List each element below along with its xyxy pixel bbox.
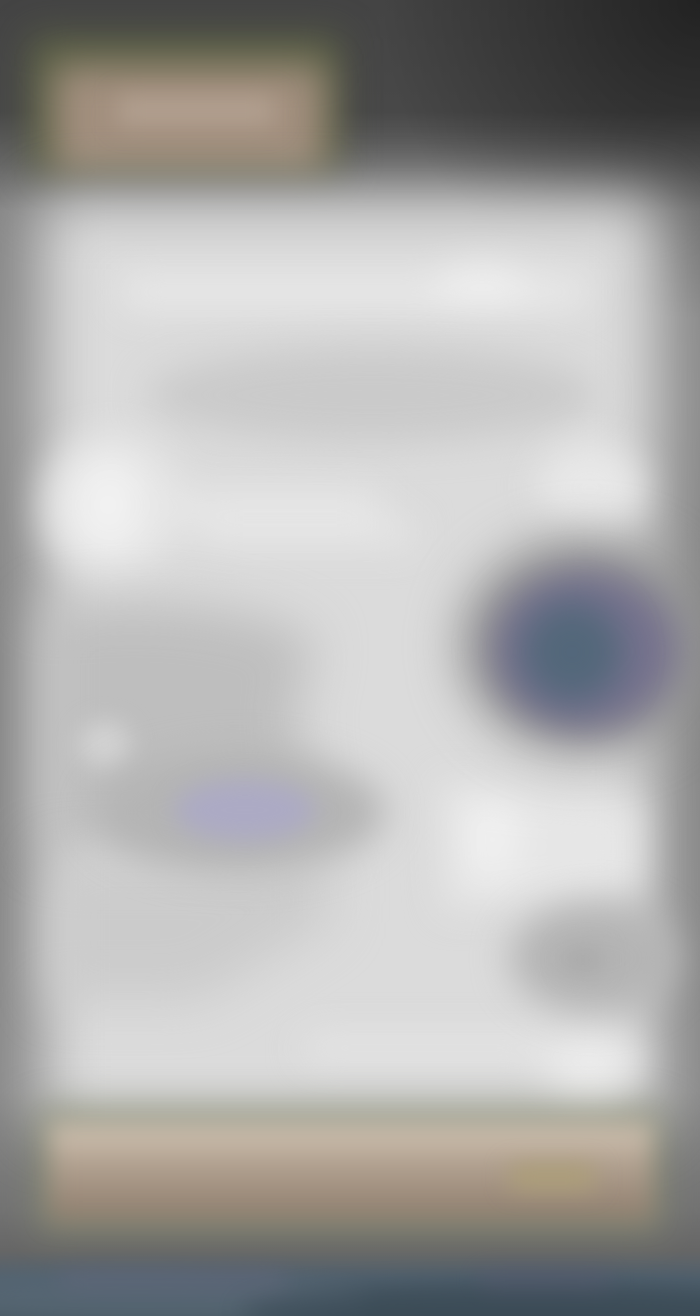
dark circle badge — [460, 537, 700, 753]
small light blob — [79, 721, 131, 769]
main panel — [40, 198, 660, 1128]
right grey oval — [510, 902, 680, 1014]
bottom tan band — [36, 1106, 664, 1234]
right light blob — [538, 444, 642, 532]
small accent in band — [510, 1166, 594, 1188]
lower band with text — [305, 1028, 640, 1096]
left grey block — [40, 602, 315, 850]
left light circle and text — [42, 433, 415, 577]
bottom-left grey block — [50, 860, 330, 1000]
headline — [120, 264, 590, 310]
central oval highlight — [95, 752, 385, 872]
tab heading — [118, 96, 274, 126]
top tab — [30, 36, 340, 176]
right light block — [440, 780, 640, 910]
upper grey block — [147, 347, 597, 443]
